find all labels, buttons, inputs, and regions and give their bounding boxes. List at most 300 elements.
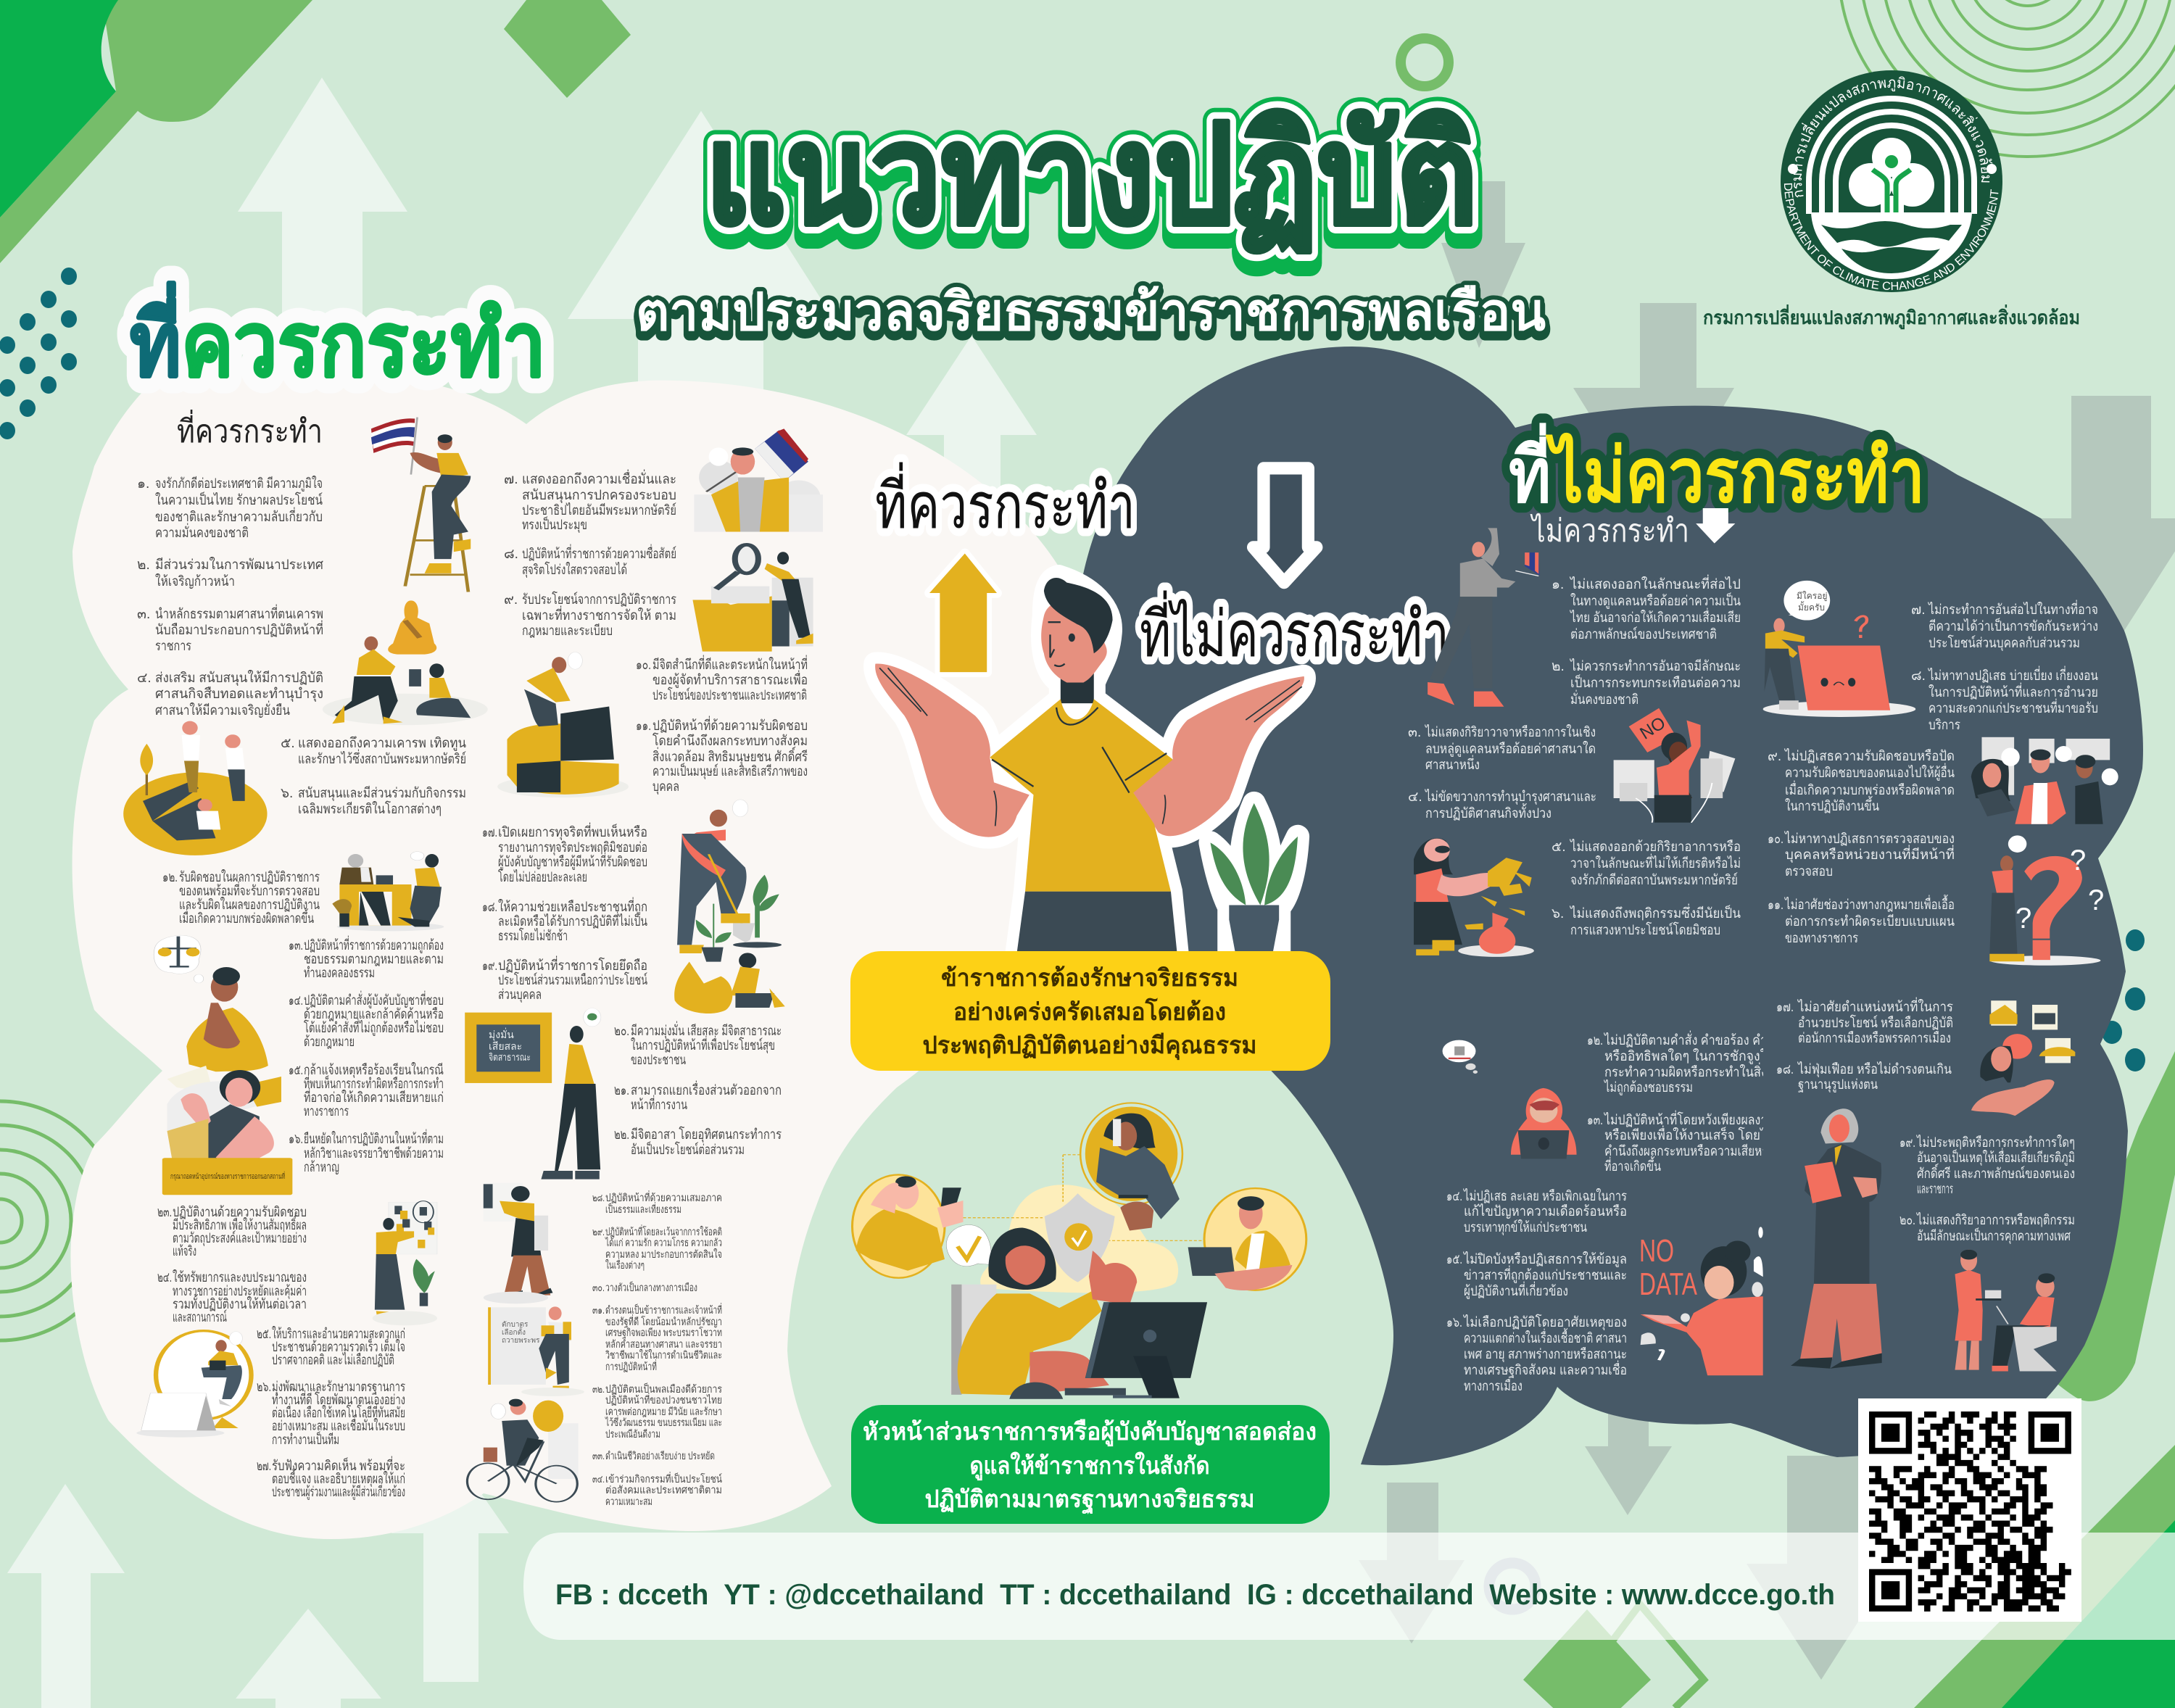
decoration: bottom diamonds	[1523, 1604, 1704, 1708]
text: left items 28-34: วางตัวเป็นกลางทางการเมือง	[605, 1280, 697, 1294]
text: right items 17-20: อำนวยประโยชน์ หรือเลือกปฏิบัติ	[1798, 1014, 1953, 1031]
text: left items 1-6: ของชาติและรักษาความลับเกี่ยวกับ	[155, 507, 323, 525]
text: left items 1-6: จงรักภักดีต่อประเทศชาติ มีความภูมิใจ	[155, 476, 323, 492]
text: right items 12-13	[1587, 1030, 1775, 1174]
text: left items 28-34: ของรัฐที่ดี โดยน้อมนำหลักปรัชญา	[605, 1314, 722, 1328]
text: left items 12-16: ด้วยกฎหมายและกล้าคัดค้านหรือ	[304, 1007, 444, 1022]
logo: กรมการเปลี่ยนแปลงสภาพภูมิอากาศและสิ่งแวดล้อม	[1794, 77, 1992, 197]
text: left items 17-22: มีจิตอาสา โดยอุทิศตนกระทำการ	[631, 1126, 782, 1143]
subtitle: ตามประมวลจริยธรรมข้าราชการพลเรือน	[636, 283, 1546, 341]
text: left items 28-34: ไว้ซึ่งวัฒนธรรม ขนบธรรมเนียม และ	[605, 1415, 722, 1429]
text: left items 17-22: ส่วนบุคคล	[498, 987, 542, 1003]
icon: man mocking flag	[1428, 528, 1540, 707]
text: left items 17-22: ของประชาชน	[631, 1053, 686, 1068]
text: left items 23-27: ต่อเนื่อง เลือกใช้เทคโนโลยีที่ทันสมัย	[272, 1403, 405, 1421]
text: right items 1-6: ๖.	[1552, 906, 1564, 921]
text: left items 12-16: ๑๒.	[162, 870, 178, 885]
icons: right illustrations lower	[1443, 1000, 2075, 1375]
text: left items 23-27: มุ่งพัฒนาและรักษามาตรฐานการ	[272, 1380, 405, 1396]
icon: person at sad box	[1763, 581, 1915, 717]
text: left items 28-34: ๓๐.	[592, 1282, 605, 1294]
text: right items 17-20: ศักดิ์ศรี และภาพลักษณ์ของตนเอง	[1917, 1163, 2075, 1182]
text: left items 17-22: ๑๗.	[482, 825, 497, 840]
icons: left illustrations middle	[154, 834, 785, 1195]
text: right items 7-11: ไม่อาศัยช่องว่างทางกฎหมายเพื่อเอื้อ	[1784, 895, 1955, 913]
icon: woman with money bag	[1414, 838, 1534, 957]
text: left items 23-27: ทางราชการอย่างประหยัดและคุ้มค่า	[173, 1284, 307, 1300]
text: left items 1-6: ๒.	[137, 557, 150, 573]
text: right items 17-20: ฐานานุรูปแห่งตน	[1798, 1077, 1878, 1093]
text: left items 7-11: ๙.	[504, 592, 518, 608]
text: left items 7-11: ความเป็นมนุษย์ และสิทธิเสรีภาพของ	[652, 762, 808, 780]
icon: hooded hacker	[1511, 1088, 1577, 1159]
text: right items 1-6: ศาสนาหนึ่ง	[1425, 755, 1480, 773]
text: right items 1-6: ไม่แสดงออกด้วยกิริยาอาการหรือ	[1569, 839, 1741, 855]
text: right items 14-16: ๑๔.	[1446, 1189, 1462, 1204]
text: right items 14-16: เพศ อายุ สภาพร่างกายหรือสถานะ	[1464, 1347, 1627, 1363]
text: left items 23-27: ปราศจากอคติ และไม่เลือกปฏิบัติ	[272, 1352, 394, 1368]
text: left items 17-22: ๑๙.	[482, 958, 497, 974]
icons: left illustrations upper	[123, 418, 823, 855]
text: left items 12-16	[162, 869, 444, 1175]
text: right items 1-6: ๕.	[1552, 840, 1566, 855]
text: left items 1-6: ในความเป็นไทย รักษาผลประโยชน์	[155, 491, 323, 508]
text: left items 12-16: ทำนองคลองธรรม	[304, 966, 375, 981]
text: NO DATA: NO	[1639, 1233, 1674, 1269]
text: right items 7-11: บริการ	[1928, 718, 1960, 733]
icons: right illustrations upper	[1414, 508, 2118, 966]
text: left items 7-11: เฉพาะที่ทางราชการจัดให้ ตาม	[522, 605, 676, 623]
icon: Buddha and kneeling people	[323, 600, 488, 725]
text: left items 28-34: ๓๔.	[592, 1474, 605, 1485]
text: right items 1-6: ต่อภาพลักษณ์ของประเทศชาติ	[1570, 626, 1717, 642]
text: left items 7-11: แสดงออกถึงความเชื่อมั่นและ	[522, 469, 676, 487]
text: right items 14-16: ไม่ปิดบังหรือปฏิเสธการให้ข้อมูล	[1462, 1251, 1627, 1267]
text: left items 28-34: ๓๑.	[592, 1305, 605, 1317]
text: left items 7-11: ของผู้จัดทำบริการสาธารณะเพื่อ	[652, 670, 808, 688]
icon: chair	[950, 1285, 996, 1394]
text: left items 1-6: ศาสนกิจสืบทอดและทำนุบำรุง	[155, 687, 323, 702]
callout: green banner: ปฏิบัติตามมาตรฐานทางจริยธรรม	[925, 1485, 1254, 1514]
bubble text: มีใครอยู่	[1797, 591, 1827, 602]
text: left items 7-11: ประโยชน์ของประชาชนและประเทศชาติ	[652, 687, 807, 703]
text: left items 7-11: สิ่งแวดล้อม สิทธิมนุษยชน ศักดิ์ศรี	[652, 746, 808, 766]
text: left items 7-11: ปฏิบัติหน้าที่ราชการด้วยความซื่อสัตย์	[522, 544, 676, 562]
logo caption: กรมการเปลี่ยนแปลงสภาพภูมิอากาศและสิ่งแวดล้อม	[1703, 304, 2080, 330]
icon: protest NO sign	[1614, 708, 1735, 823]
text: right items 1-6: ลบหลู่ดูแคลนหรือด้อยค่าศาสนาใด	[1425, 741, 1596, 757]
text: right items 1-6	[1408, 574, 1741, 938]
text: left items 1-6: มีส่วนร่วมในการพัฒนาประเทศ	[155, 557, 323, 573]
icons: left illustrations lower	[136, 1183, 584, 1502]
text: right items 7-11: ไม่หาทางปฏิเสธการตรวจสอบของ	[1784, 831, 1955, 847]
icon: clock, calendar and man with laptop	[136, 1331, 252, 1438]
text: left items 1-6: นับถือมาประกอบการปฏิบัติหน้าที่	[155, 620, 323, 638]
icon: cloud behind shield	[980, 1185, 1178, 1293]
text: right items 1-6: ๓.	[1408, 725, 1421, 740]
decoration: concentric rings left	[0, 1101, 120, 1340]
icon: man planting lower body	[677, 834, 782, 962]
text: right items 7-11: ตรวจสอบ	[1785, 864, 1833, 879]
icon: man at sticky note board	[373, 1201, 437, 1325]
text: left items 17-22: มีความมุ่งมั่น เสียสละ มีจิตสาธารณะ	[631, 1021, 782, 1040]
text: left items 12-16: ปฏิบัติหน้าที่ราชการด้วยความถูกต้อง	[304, 935, 444, 953]
board text: จิตสาธารณะ	[489, 1051, 531, 1063]
text: right items 14-16: ผู้ปฏิบัติงานที่เกี่ยวข้อง	[1464, 1281, 1568, 1299]
icon: woman on phone circle	[1080, 1103, 1182, 1231]
text: left items 28-34: ความหลง มาประกอบการตัดสินใจ	[605, 1248, 722, 1261]
icon: girl dreaming of luxury	[1971, 1000, 2075, 1116]
text: left items 7-11: ๑๐.	[636, 658, 651, 673]
text: left items 1-6: ๔.	[137, 671, 152, 686]
text: left items 28-34: การปฏิบัติหน้าที่	[605, 1359, 657, 1373]
icon: white down arrow	[1696, 508, 1735, 543]
text: left items 28-34	[592, 1190, 722, 1508]
text: left items 28-34: ดำเนินชีวิตอย่างเรียบง่าย ประหยัด	[605, 1450, 715, 1462]
text: left items 17-22: ๒๐.	[614, 1024, 629, 1039]
text: left items 12-16: ด้วยกฎหมาย	[304, 1035, 355, 1050]
icon: waitress and seated man	[1955, 1250, 2057, 1372]
icon: pants	[1017, 892, 1177, 953]
icon: shield	[1045, 1193, 1115, 1282]
text: left items 12-16: ทางราชการ	[304, 1104, 349, 1119]
text: right items 17-20: ไม่ฟุ่มเฟือย หรือไม่ดำรงตนเกิน	[1797, 1061, 1952, 1078]
text: right items 7-11: ต่อการกระทำผิดระเบียบแบบแผน	[1785, 913, 1955, 929]
text: left items 23-27: ๒๔.	[157, 1270, 172, 1285]
main title: แนวทางปฏิบัติ	[705, 99, 1478, 253]
text: left items 23-27: มีประสิทธิภาพ เพื่อให้งานสัมฤทธิ์ผล	[173, 1214, 307, 1233]
text: right items 7-11: ไม่ปฏิเสธความรับผิดชอบหรือปัด	[1784, 748, 1955, 764]
icon: woman at computer	[958, 1228, 1137, 1396]
text: right items 7-11: ไม่กระทำการอันส่อไปในทางที่อาจ	[1927, 600, 2098, 618]
text: left items 1-6: สนับสนุนและมีส่วนร่วมกับกิจกรรม	[298, 785, 466, 802]
question mark accents: ?	[2070, 845, 2086, 876]
icon: Thai flag man in yellow jacket	[694, 428, 823, 532]
text: right items 1-6: วาจาในลักษณะที่ไม่ให้เกียรติหรือไม่	[1570, 853, 1741, 871]
should not do heading: ที่ไม่ควรกระทำ	[1509, 423, 1925, 518]
text: right items 7-11: ในการปฏิบัติหน้าที่และการอำนวย	[1928, 682, 2098, 700]
text: right items 1-6: ๔.	[1408, 789, 1422, 805]
text: left items 1-6: และรักษาไว้ซึ่งสถาบันพระมหากษัตริย์	[298, 749, 466, 767]
icon: man raising Thai flag on ladder	[371, 418, 471, 592]
text: left items 28-34: วิชาชีพมาใช้ในการดำเนินชีวิตและ	[605, 1348, 722, 1361]
text: left items 7-11: โดยคำนึงถึงผลกระทบทางสังคม	[652, 732, 808, 749]
icon: hair	[1044, 578, 1113, 653]
text: right items 7-11: ในการปฏิบัติงานขึ้น	[1785, 796, 1879, 814]
text: left items 17-22: หน้าที่การงาน	[631, 1095, 687, 1113]
text: right items 7-11: ของทางราชการ	[1785, 931, 1858, 946]
text: left items 7-11: ๗.	[504, 472, 518, 487]
text: right items 12-13: หรือเพียงเพื่อให้งานเสร็จ โดยไม่	[1604, 1125, 1775, 1143]
text: left items 28-34: ในเรื่องต่างๆ	[605, 1258, 645, 1272]
text: left items 12-16: ปฏิบัติตามคำสั่งผู้บังคับบัญชาที่ชอบ	[304, 990, 444, 1008]
panel: should not do dark blob	[1077, 347, 2143, 1465]
text: right items 7-11: ๑๑.	[1768, 897, 1784, 913]
text: left items 28-34: เคารพต่อกฎหมาย มีวินัย และรักษา	[605, 1406, 722, 1418]
icon: headset woman	[1641, 1227, 1763, 1375]
text: right items 12-13: ไม่ถูกต้องชอบธรรม	[1603, 1079, 1693, 1095]
icon: thinking man and woman with sign	[154, 935, 292, 1195]
text: left items 7-11: ทรงเป็นประมุข	[522, 515, 587, 534]
text: left items 7-11: สนับสนุนการปกครองระบอบ	[522, 488, 676, 504]
text: right items 1-6: ในทางดูแคลนหรือด้อยค่าความเป็น	[1570, 592, 1741, 609]
text: left items 23-27: ตอบชี้แจง และอธิบายเหตุผลให้แก่	[272, 1469, 405, 1488]
question mark accents: ?	[2016, 903, 2031, 934]
text: right items 17-20: ไม่ประพฤติหรือการกระทำการใดๆ	[1915, 1135, 2075, 1151]
should not do heading: ที่ไม่ควรกระทำ	[1509, 423, 1925, 518]
icon: woman with checklist	[488, 1306, 584, 1396]
text: right items 7-11: ๑๐.	[1768, 832, 1784, 847]
text: left items 28-34: ความเหมาะสม	[605, 1496, 652, 1508]
text: left items 28-34: ได้แก่ ความรัก ความโกรธ ความกลัว	[605, 1236, 722, 1249]
board text: มุ่งมั่น	[489, 1028, 514, 1041]
icon: park volunteers with bench	[123, 721, 268, 855]
callout: yellow banner	[850, 951, 1330, 1071]
decoration: bottom right green corner	[1914, 1445, 2175, 1708]
text: left items 23-27: ประชาชนผู้ร่วมงานและผู้มีส่วนเกี่ยวข้อง	[272, 1482, 405, 1500]
text: left items 23-27: ให้บริการและอำนวยความสะดวกแก่	[272, 1326, 405, 1342]
text: left items 28-34: ปฏิบัติหน้าที่โดยละเว้นจากการใช้อคติ	[605, 1224, 722, 1238]
callout: green banner: หัวหน้าส่วนราชการหรือผู้บังคับบัญชาสอดส่อง	[863, 1418, 1317, 1447]
text: left items 7-11: ๑๑.	[636, 718, 651, 734]
text: left items 28-34: เป็นธรรมและเที่ยงธรรม	[605, 1202, 682, 1216]
icon: face	[1041, 602, 1107, 682]
text: right items 1-6: การปฏิบัติศาสนกิจทั้งปวง	[1425, 803, 1552, 821]
icon: shirt	[990, 699, 1173, 892]
callout: yellow banner: อย่างเคร่งครัดเสมอโดยต้อง	[953, 998, 1226, 1025]
text: right items 17-20: ๑๘.	[1776, 1062, 1794, 1077]
text: left items 12-16: ยืนหยัดในการปฏิบัติงานในหน้าที่ตาม	[304, 1129, 444, 1147]
text: right items 14-16: ๑๖.	[1446, 1315, 1462, 1330]
text: left items 1-6: นำหลักธรรมตามศาสนาที่ตนเคารพ	[155, 604, 323, 622]
center label: should do: ที่ควรกระทำ	[875, 462, 1135, 542]
text: left items 17-22: ประโยชน์ส่วนรวมเหนือกว่าประโยชน์	[498, 971, 647, 988]
text: left items 1-6: ส่งเสริม สนับสนุนให้มีการปฏิบัติ	[155, 670, 323, 687]
text: left items 28-34: ๒๘.	[592, 1193, 605, 1204]
bubble text	[1797, 591, 1827, 613]
text: left items 23-27	[157, 1205, 405, 1500]
text: left items 1-6: ๕.	[281, 736, 295, 751]
text: left items 1-6: แสดงออกถึงความเคารพ เทิดทูน	[298, 736, 466, 751]
text: left items 23-27: ๒๕.	[257, 1327, 271, 1342]
text: right items 1-6: ไม่แสดงกิริยาวาจาหรืออาการในเชิง	[1424, 724, 1596, 740]
text: left items 23-27: ประชาชนด้วยความรวดเร็ว เต็มใจ	[272, 1338, 405, 1355]
decoration: teal dots	[0, 268, 2145, 1071]
text: right items 7-11: ประโยชน์ส่วนบุคคลกับส่วนรวม	[1928, 634, 2080, 652]
text: left items 28-34: ปฏิบัติหน้าที่ด้วยความเสมอภาค	[605, 1190, 722, 1204]
text: left items 12-16: โต้แย้งคำสั่งที่ไม่ถูกต้องหรือไม่ชอบ	[304, 1018, 444, 1036]
text: right items 17-20: ๑๗.	[1776, 1000, 1794, 1015]
QR code	[1858, 1398, 2081, 1622]
text: left items 17-22: ละเมิดหรือได้รับการปฏิบัติที่ไม่เป็น	[498, 911, 647, 929]
text: right items 14-16: ไม่ปฏิเสธ ละเลย หรือเพิกเฉยในการ	[1462, 1188, 1627, 1204]
icon: man looking at yellow board	[465, 1008, 601, 1180]
text: left items 23-27: ทำงานที่ดี โดยพัฒนาตนเองอย่าง	[272, 1390, 405, 1408]
icon: woman with magnifier and folder	[692, 544, 813, 652]
text: right items 7-11: ๗.	[1911, 602, 1926, 618]
left panel heading: ที่ควรกระทำ	[177, 409, 323, 449]
text: left items 28-34: เข้าร่วมกิจกรรมที่เป็นประโยชน์	[605, 1472, 722, 1485]
icon: man with phone circle	[853, 1174, 963, 1278]
decoration: top left green corner	[0, 0, 312, 263]
text: left items 7-11: มีจิตสำนึกที่ดีและตระหนักในหน้าที่	[652, 655, 808, 673]
text: left items 28-34: ดำรงตนเป็นข้าราชการและเจ้าหน้าที่	[605, 1303, 722, 1317]
text: left items 12-16: กล้าแจ้งเหตุหรือร้องเรียนในกรณี	[304, 1062, 444, 1079]
text: right items 14-16: บรรเทาทุกข์ให้แก่ประชาชน	[1464, 1219, 1587, 1236]
text: right items 17-20: อันมีลักษณะเป็นการคุกคามทางเพศ	[1917, 1227, 2071, 1245]
text: right items 7-11: ความรับผิดชอบของตนเองไปให้ผู้อื่น	[1785, 763, 1955, 781]
text: left items 12-16: ของตนพร้อมที่จะรับการตรวจสอบ	[179, 881, 320, 899]
footer social text: FB : dcceth YT : @dccethailand TT : dccethailand IG : dccethailand Website : www.dcce.go.th	[555, 1579, 1835, 1611]
text: right items 12-13: ๑๒.	[1587, 1033, 1603, 1048]
text: left items 7-11: รับประโยชน์จากการปฏิบัติราชการ	[522, 591, 676, 608]
icon: connectors	[963, 1155, 1204, 1240]
text: left items 23-27: แท้จริง	[173, 1244, 196, 1259]
should do heading: ที่ควรกระทำ	[130, 281, 546, 395]
icon: three colleagues	[1971, 737, 2118, 824]
text: left items 17-22: ปฏิบัติหน้าที่ราชการโดยยึดถือ	[498, 955, 647, 974]
text: left items 7-11: กฎหมายและระเบียบ	[522, 623, 613, 639]
decoration: top diamond	[504, 0, 631, 98]
center: supervisor illustration	[853, 1103, 1306, 1399]
text: left items 17-22: รายงานการทุจริตประพฤติมิชอบต่อ	[498, 840, 647, 856]
text: left items 17-22: อันเป็นประโยชน์ต่อส่วนรวม	[631, 1140, 745, 1158]
sign text: กรุณาถอดหน้าอุปกรณ์ของทางราชการออกนอกสถานที่	[170, 1171, 285, 1181]
text: left items 23-27: และสถานการณ์	[173, 1309, 227, 1325]
text: left items 17-22: ๒๑.	[614, 1083, 629, 1098]
question mark accents: ?	[2088, 884, 2104, 916]
text: left items 1-6: เฉลิมพระเกียรติในโอกาสต่างๆ	[298, 800, 442, 817]
text: right items 7-11: ไม่หาทางปฏิเสธ บ่ายเบี่ยง เกี่ยงงอน	[1927, 666, 2098, 684]
text: left items 7-11	[504, 469, 808, 795]
text: left items 17-22: ธรรมโดยไม่ชักช้า	[498, 927, 568, 944]
text: right items 1-6: การแสวงหาประโยชน์โดยมิชอบ	[1570, 921, 1720, 938]
icon: woman at wall board	[484, 1183, 552, 1303]
text: right items 14-16: ไม่เลือกปฏิบัติโดยอาศัยเหตุของ	[1462, 1314, 1627, 1331]
text: right items 17-20: อันอาจเป็นเหตุให้เสื่อมเสียเกียรติภูมิ	[1917, 1148, 2075, 1166]
text: right items 7-11: บุคคลหรือหน่วยงานที่มีหน้าที่	[1785, 845, 1955, 863]
text: right items 17-20: ๒๐.	[1900, 1213, 1915, 1228]
decoration: top green ring	[1401, 38, 1449, 86]
callout: green banner: ดูแลให้ข้าราชการในสังกัด	[970, 1451, 1209, 1481]
text: right items 1-6: ไม่แสดงถึงพฤติกรรมซึ่งมีนัยเป็น	[1569, 903, 1741, 921]
icon: monitor	[1009, 1302, 1207, 1399]
logo	[1781, 70, 2002, 292]
text: left items 1-6	[137, 476, 466, 817]
text: right items 1-6: มั่นคงของชาติ	[1570, 689, 1638, 708]
callout: yellow banner: ข้าราชการต้องรักษาจริยธรรม	[941, 964, 1238, 991]
main title: แนวทางปฏิบัติ	[705, 99, 1478, 253]
text: left items 28-34: ๓๒.	[592, 1384, 605, 1396]
text: left items 17-22: เปิดเผยการทุจริตที่พบเห็นหรือ	[498, 822, 647, 841]
text: right items 14-16: ทางเศรษฐกิจสังคม และความเชื่อ	[1464, 1360, 1627, 1378]
text: right items 14-16: ทางการเมือง	[1464, 1379, 1522, 1394]
callout: green banner	[851, 1405, 1330, 1524]
icon: neck	[1061, 670, 1094, 703]
text: right items 7-11	[1768, 600, 2098, 946]
main title: แนวทางปฏิบัติ	[705, 109, 1478, 264]
text: left items 17-22: โดยไม่ปล่อยปละละเลย	[498, 868, 587, 885]
main title: แนวทางปฏิบัติ	[705, 99, 1478, 253]
text: right items 12-13: ๑๓.	[1587, 1113, 1603, 1128]
callout: yellow banner: ประพฤติปฏิบัติตนอย่างมีคุณธรรม	[922, 1032, 1257, 1061]
text: right items 7-11: ความสะดวกแก่ประชาชนที่มาขอรับ	[1928, 698, 2098, 716]
text: left items 17-22: สามารถแยกเรื่องส่วนตัวออกจาก	[631, 1080, 782, 1098]
text: left items 28-34: ๒๙.	[592, 1227, 605, 1238]
text: right items 7-11: ๘.	[1911, 668, 1926, 684]
text: right items 14-16: ๑๕.	[1446, 1252, 1462, 1267]
text: left items 23-27: อย่างเหมาะสม และเชื่อมั่นในระบบ	[272, 1416, 405, 1434]
text: left items 23-27: ตามวัตถุประสงค์และเป้าหมายอย่าง	[173, 1230, 307, 1247]
text: right items 1-6: ๑.	[1552, 577, 1564, 592]
text: left items 1-6: ๑.	[137, 476, 149, 492]
text: left items 7-11: ประชาธิปไตยอันมีพระมหากษัตริย์	[522, 502, 676, 518]
icon: man with laptop circle	[1188, 1188, 1306, 1290]
text: right items 14-16: แก้ไขปัญหาความเดือดร้อนหรือ	[1464, 1203, 1627, 1219]
text: NO on sign: NO	[1636, 713, 1669, 744]
text: left items 1-6: ๖.	[281, 786, 293, 801]
icon: hands and arms	[875, 663, 1304, 837]
text: right items 1-6: ไม่ควรกระทำการอันอาจมีลักษณะ	[1569, 658, 1741, 674]
text: right items 12-13: ไม่ปฏิบัติตามคำสั่ง คำขอร้อง คำขู่	[1603, 1030, 1775, 1048]
text: right items 17-20: ไม่อาศัยตำแหน่งหน้าที่ในการ	[1797, 997, 1953, 1015]
should do heading: ที่ควรกระทำ	[130, 281, 546, 395]
decoration: grey down arrows	[1359, 181, 2175, 1680]
text: left items 7-11: บุคคล	[652, 779, 679, 795]
icon: woman cycling with globe	[467, 1399, 579, 1502]
text: right items 12-13: ไม่ปฏิบัติหน้าที่โดยหวังเพียงผลงาน	[1603, 1110, 1775, 1128]
text: left items 12-16: ๑๔.	[289, 993, 303, 1008]
text: left items 28-34: หลักคำสอนทางศาสนา และจรรยา	[605, 1339, 722, 1351]
text: left items 12-16: เมื่อเกิดความบกพร่องผิดพลาดขึ้น	[179, 908, 314, 926]
bubble text: มั้ยครับ	[1798, 601, 1825, 613]
text: left items 28-34: ปฏิบัติตนเป็นพลเมืองดีด้วยการ	[605, 1382, 722, 1396]
text: left items 1-6: ให้เจริญก้าวหน้า	[155, 573, 235, 589]
text: right items 1-6: เป็นการกระทบกระเทือนต่อความ	[1570, 673, 1741, 691]
text: left items 17-22: ผู้บังคับบัญชาหรือผู้มีหน้าที่รับผิดชอบ	[498, 852, 647, 870]
text: left items 1-6: ความมั่นคงของชาติ	[155, 523, 249, 541]
text: right items 1-6: ไม่ขัดขวางการทำนุบำรุงศาสนาและ	[1424, 789, 1596, 805]
center: man shrugging sticker	[875, 468, 1317, 953]
text: left items 28-34: ๓๓.	[592, 1451, 605, 1462]
text: left items 23-27: ปฏิบัติงานด้วยความรับผิดชอบ	[173, 1205, 307, 1220]
text: right items 7-11: เมื่อเกิดความบกพร่องหรือผิดพลาด	[1785, 780, 1955, 798]
icon: woman sorting recycling bags	[674, 953, 785, 1013]
text: left items 23-27: การทำงานเป็นทีม	[272, 1430, 339, 1448]
text: left items 17-22: ให้ความช่วยเหลือประชาชนที่ถูก	[498, 897, 647, 915]
checklist text: เลือกตั้ง	[502, 1327, 526, 1337]
panel: should do cream blob	[70, 373, 1082, 1539]
text: left items 28-34: เศรษฐกิจพอเพียง พระบรมราโชวาท	[605, 1326, 722, 1339]
text: right items 17-20: และราชการ	[1917, 1182, 1953, 1197]
text: NO DATA	[1639, 1233, 1697, 1302]
right panel heading: ไม่ควรกระทำ	[1530, 513, 1689, 549]
text: right items 17-20: ไม่แสดงกิริยาอาการหรือพฤติกรรม	[1915, 1212, 2075, 1228]
text: left items 12-16: ชอบธรรมตามกฎหมายและตาม	[304, 952, 444, 967]
text: left items 12-16: ๑๕.	[289, 1063, 303, 1078]
text: left items 28-34: ต่อสังคมและประเทศชาติตาม	[605, 1485, 722, 1496]
text: left items 12-16: ที่พบเห็นการกระทำผิดหรือการกระทำ	[304, 1074, 444, 1092]
text: right items 1-6: ไม่แสดงออกในลักษณะที่ส่อไป	[1569, 574, 1741, 592]
text: left items 23-27: รับฟังความคิดเห็น พร้อมที่จะ	[272, 1456, 405, 1474]
text: left items 12-16: ๑๖.	[289, 1132, 303, 1147]
text: right items 1-6: ไทย อันอาจก่อให้เกิดความเสื่อมเสีย	[1569, 608, 1741, 626]
icon: plant	[1210, 803, 1298, 953]
checklist text: ถวายพระพร	[502, 1337, 540, 1345]
text: right items 17-20: ต่อนักการเมืองหรือพรรคการเมือง	[1798, 1031, 1951, 1046]
text: left items 1-6: ๓.	[137, 607, 150, 622]
text: right items 1-6: จงรักภักดีต่อสถาบันพระมหากษัตริย์	[1570, 872, 1738, 888]
